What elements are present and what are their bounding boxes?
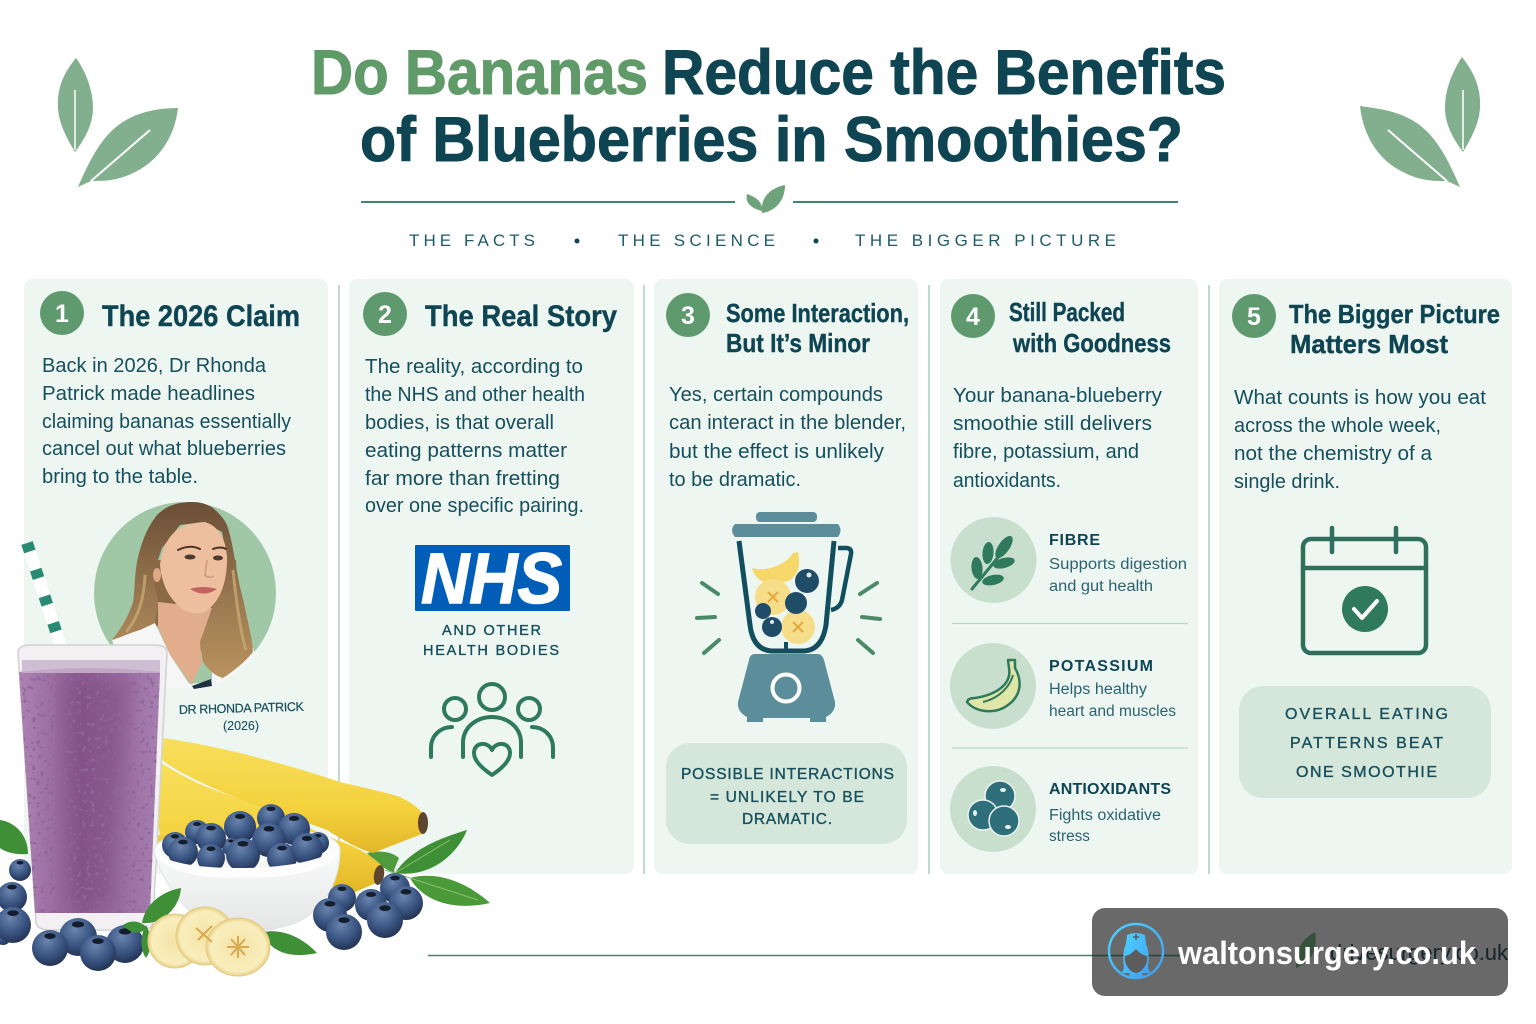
coat right bbox=[212, 648, 256, 686]
NHS caption: AND OTHER bbox=[442, 623, 541, 639]
panel 1: the 2026 claim bbox=[24, 279, 328, 874]
body text 2: bodies, is that overall bbox=[365, 412, 554, 434]
heading 2: The Real Story bbox=[425, 300, 617, 333]
title: Do Bananas bbox=[311, 38, 648, 108]
fibre text bbox=[1049, 532, 1187, 595]
body text 4: antioxidants. bbox=[953, 470, 1061, 492]
antioxidants text bbox=[1049, 781, 1171, 845]
benefit: antioxidants bbox=[950, 766, 1036, 852]
portrait caption bbox=[179, 700, 305, 733]
callout 5 bbox=[1239, 686, 1491, 798]
body text 3: Yes, certain compounds bbox=[669, 384, 883, 406]
benefit: potassium bbox=[950, 643, 1036, 729]
title bbox=[311, 38, 1226, 175]
antioxidants text: Fights oxidative bbox=[1049, 807, 1161, 824]
body text 3 bbox=[669, 384, 906, 491]
heading 5: The Bigger Picture bbox=[1289, 299, 1500, 329]
neck bbox=[158, 602, 212, 685]
decorative leaves: top left bbox=[58, 58, 178, 187]
lower banana bbox=[157, 763, 383, 893]
number badge 1: 1 bbox=[55, 300, 69, 328]
body text 5: not the chemistry of a bbox=[1234, 443, 1433, 465]
number badge 4 bbox=[951, 294, 995, 338]
heading 5 bbox=[1289, 299, 1500, 359]
body text 1 bbox=[42, 355, 291, 488]
body text 4: Your banana-blueberry bbox=[953, 385, 1162, 407]
heading 4: Still Packed bbox=[1009, 297, 1125, 327]
body text 1: Patrick made headlines bbox=[42, 383, 255, 405]
callout 3: DRAMATIC. bbox=[742, 811, 832, 828]
NHS caption: HEALTH BODIES bbox=[423, 643, 559, 659]
body text 2: far more than fretting bbox=[365, 468, 560, 490]
callout 5: OVERALL EATING bbox=[1285, 706, 1448, 723]
potassium text bbox=[1049, 658, 1176, 720]
heading 4: with Goodness bbox=[1012, 328, 1171, 358]
hair bbox=[112, 502, 253, 678]
column dividers bbox=[339, 285, 1209, 874]
body text 1: Back in 2026, Dr Rhonda bbox=[42, 355, 267, 377]
footer watermark behind badge: drivesurgery.co.uk bbox=[1330, 940, 1509, 965]
panel 3: some interaction bbox=[654, 279, 918, 874]
NHS caption bbox=[423, 623, 559, 659]
potassium text: heart and muscles bbox=[1049, 703, 1176, 720]
portrait: Dr Rhonda Patrick bbox=[94, 502, 276, 689]
footer line bbox=[428, 954, 1092, 956]
number badge 3: 3 bbox=[681, 302, 695, 330]
smoothie glass bbox=[18, 645, 168, 930]
body text 4: smoothie still delivers bbox=[953, 413, 1152, 435]
body text 4: fibre, potassium, and bbox=[953, 441, 1139, 463]
bananas bbox=[157, 738, 428, 893]
body text 2: the NHS and other health bbox=[365, 384, 585, 406]
icon: blender with banana and blueberries bbox=[697, 512, 880, 722]
heading 5: Matters Most bbox=[1290, 329, 1448, 359]
website badge: drivesurgery.co.uk bbox=[1330, 940, 1509, 965]
body text 1: cancel out what blueberries bbox=[42, 438, 286, 460]
body text 2: The reality, according to bbox=[365, 356, 583, 378]
callout 3: POSSIBLE INTERACTIONS bbox=[681, 766, 894, 783]
decorative leaves: top right bbox=[1360, 57, 1480, 187]
heading 4 bbox=[1009, 297, 1171, 358]
number badge 4: 4 bbox=[966, 303, 980, 331]
body text 2: eating patterns matter bbox=[365, 440, 567, 462]
callout 5: ONE SMOOTHIE bbox=[1296, 764, 1437, 781]
number badge 3 bbox=[666, 293, 710, 337]
body text 5: across the whole week, bbox=[1234, 415, 1441, 437]
number badge 2: 2 bbox=[378, 301, 392, 329]
body text 5: What counts is how you eat bbox=[1234, 387, 1486, 409]
tagline: THE FACTS bbox=[409, 231, 535, 250]
body text 2 bbox=[365, 356, 585, 517]
bowl front rim bbox=[155, 848, 339, 878]
straw bbox=[27, 543, 66, 662]
heading 3 bbox=[726, 298, 909, 358]
blueberries on table bbox=[0, 859, 423, 971]
portrait caption: DR RHONDA PATRICK bbox=[179, 700, 305, 717]
body text 4 bbox=[953, 385, 1162, 492]
leaves behind food bbox=[0, 820, 490, 906]
fibre text: and gut health bbox=[1049, 578, 1153, 595]
callout 3 bbox=[666, 743, 907, 844]
body text 1: claiming bananas essentially bbox=[42, 411, 291, 433]
body text 1: bring to the table. bbox=[42, 466, 198, 488]
body text 3: but the effect is unlikely bbox=[669, 441, 884, 463]
website badge bbox=[1092, 908, 1509, 996]
antioxidants text: ANTIOXIDANTS bbox=[1049, 781, 1171, 798]
fibre text: Supports digestion bbox=[1049, 556, 1187, 573]
upper banana bbox=[162, 738, 422, 853]
panel 2: the real story bbox=[349, 279, 634, 874]
icon: people with heart bbox=[431, 684, 553, 775]
panel 4: still packed with goodness bbox=[940, 279, 1198, 874]
body text 3: to be dramatic. bbox=[669, 469, 801, 491]
tagline: THE SCIENCE bbox=[618, 231, 775, 250]
title: of Blueberries in Smoothies? bbox=[360, 105, 1183, 175]
body text 5: single drink. bbox=[1234, 471, 1340, 493]
food photo: smoothie, bananas, blueberries bbox=[0, 543, 490, 976]
bowl bbox=[154, 832, 340, 930]
icon: calendar with check bbox=[1303, 528, 1426, 653]
callout 3: = UNLIKELY TO BE bbox=[710, 789, 864, 806]
panel 5: the bigger picture bbox=[1219, 279, 1512, 874]
tagline bbox=[409, 231, 1116, 250]
number badge 2 bbox=[363, 292, 407, 336]
heading 3: Some Interaction, bbox=[726, 298, 909, 328]
icon: nurse logo bbox=[1109, 924, 1163, 978]
number badge 5 bbox=[1232, 294, 1276, 338]
number badge 5: 5 bbox=[1247, 303, 1261, 331]
website url: waltonsurgery.co.uk bbox=[1177, 935, 1476, 971]
number badge 1 bbox=[40, 291, 84, 335]
NHS logo: NHS bbox=[421, 540, 562, 619]
callout 5: PATTERNS BEAT bbox=[1290, 735, 1443, 752]
third banana sliver bbox=[157, 835, 172, 855]
potassium text: POTASSIUM bbox=[1049, 658, 1153, 675]
body text 5 bbox=[1234, 387, 1486, 493]
body text 3: can interact in the blender, bbox=[669, 412, 906, 434]
heading 3: But It’s Minor bbox=[726, 328, 870, 358]
title: Reduce the Benefits bbox=[662, 38, 1226, 108]
face bbox=[160, 522, 227, 613]
tagline: THE BIGGER PICTURE bbox=[855, 231, 1116, 250]
coat bbox=[112, 623, 192, 688]
banana slices bbox=[148, 907, 270, 976]
hair behind face bbox=[150, 560, 240, 676]
blueberries in bowl bbox=[162, 804, 329, 873]
portrait caption: (2026) bbox=[223, 719, 259, 733]
fibre text: FIBRE bbox=[1049, 532, 1100, 549]
antioxidants text: stress bbox=[1049, 828, 1090, 845]
title divider with leaf bbox=[361, 185, 1178, 213]
benefit: fibre bbox=[950, 517, 1036, 603]
heading 1: The 2026 Claim bbox=[102, 300, 300, 333]
leaves in front bbox=[123, 888, 317, 958]
body text 2: over one specific pairing. bbox=[365, 495, 584, 517]
potassium text: Helps healthy bbox=[1049, 681, 1147, 698]
